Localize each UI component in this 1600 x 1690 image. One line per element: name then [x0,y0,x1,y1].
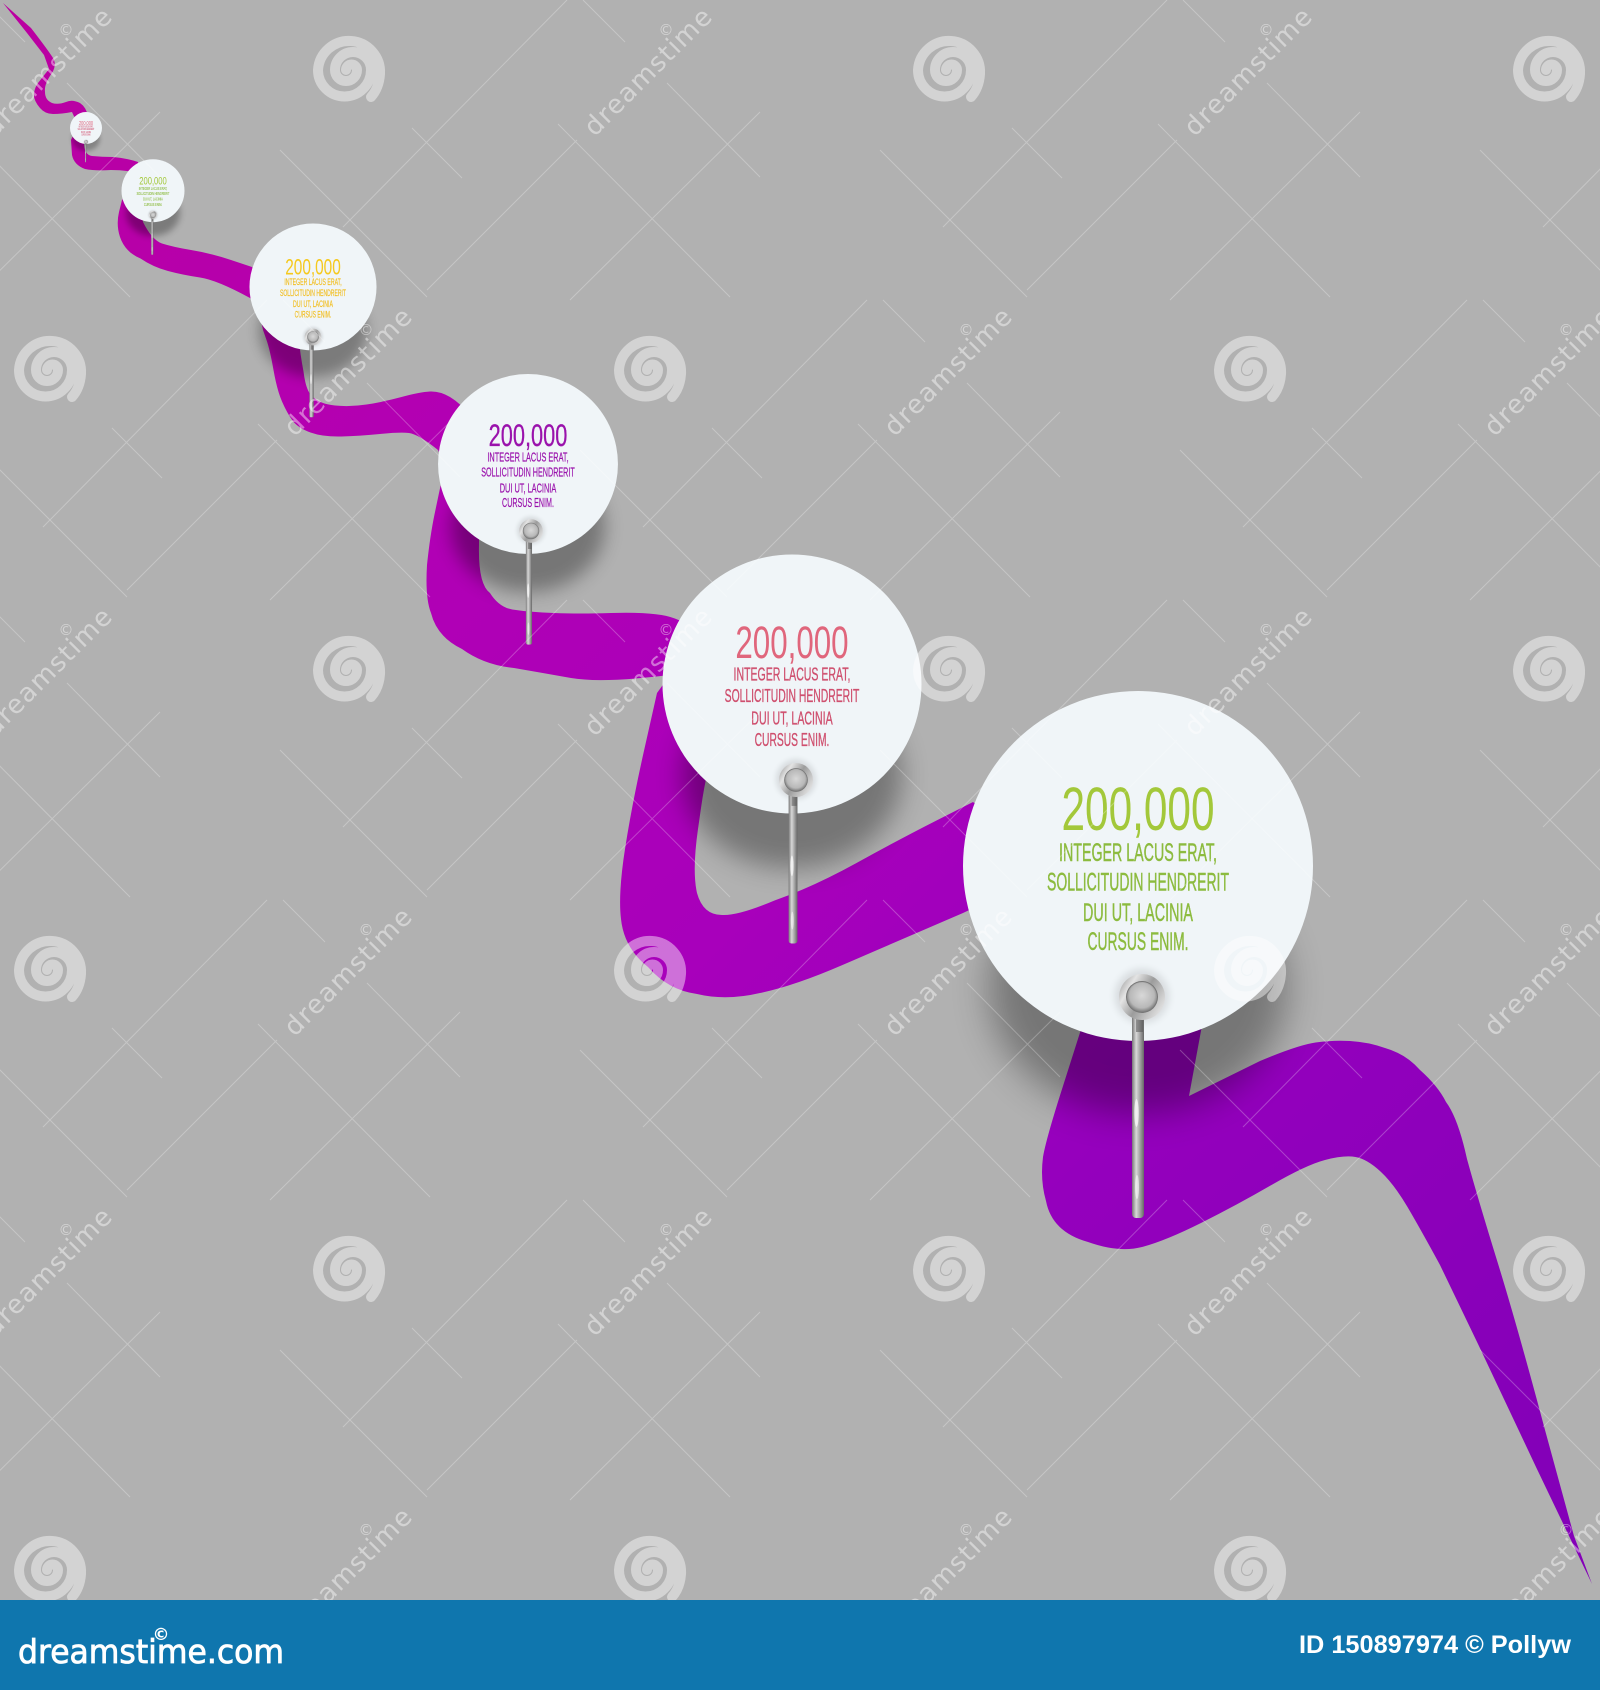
circle 4 shadow [451,462,605,592]
watermark overlay: © [58,621,74,639]
circle 6: green stat large: SOLLICITUDIN HENDRERIT [1047,868,1229,896]
circle 1: red stat [70,112,102,144]
footer bar [0,1600,1600,1690]
watermark overlay: © [1258,21,1274,39]
circle 6: green stat large: INTEGER LACUS ERAT, [1059,839,1217,867]
circle 1: red stat: 200,000 [79,121,93,127]
pin 4 [517,517,545,645]
circle 1: red stat: CURSUS ENIM. [81,135,91,137]
circle 5: rose stat: DUI UT, LACINIA [751,708,833,729]
watermark overlay: © [958,321,974,339]
circle 2: green stat [122,159,184,222]
circle 6 shadow [989,862,1287,1114]
circle 2: green stat: INTEGER LACUS ERAT, [139,186,167,191]
circle 3: yellow stat: DUI UT, LACINIA [293,299,334,309]
watermark overlay: © [358,321,374,339]
pin 3 [303,327,323,417]
watermark overlay: © [1558,921,1574,939]
circle 5: rose stat: 200,000 [735,617,849,668]
watermark overlay: © [658,621,674,639]
watermark overlay: © [58,1221,74,1239]
circle 5: rose stat: SOLLICITUDIN HENDRERIT [725,685,859,706]
circle 6: green stat large [963,691,1313,1041]
circle 1 shadow [72,127,100,151]
circle 4: purple stat: SOLLICITUDIN HENDRERIT [481,465,575,480]
watermark overlay: © [658,21,674,39]
watermark overlay: © [958,1521,974,1539]
circle 3: yellow stat [249,223,377,351]
watermark overlay: dreamstime [578,2,718,142]
circle 4: purple stat: CURSUS ENIM. [502,495,554,510]
circle 4: purple stat: 200,000 [489,418,567,453]
watermark overlay: © [1558,321,1574,339]
watermark overlay: dreamstime [1178,602,1318,742]
pin 2 [148,210,158,255]
watermark overlay: dreamstime [878,302,1018,442]
circle 6: green stat large: DUI UT, LACINIA [1083,899,1193,927]
pin 5 [776,759,816,944]
circle 3: yellow stat: SOLLICITUDIN HENDRERIT [280,288,346,298]
circle 5: rose stat [662,554,922,814]
watermark overlay: dreamstime [1178,2,1318,142]
circle 4: purple stat [438,374,618,554]
circle 1: red stat: INTEGER LACUS ERAT, [79,126,93,129]
circle 3 shadow [259,285,367,377]
watermark overlay: © [1258,1221,1274,1239]
watermark overlay: © [358,1521,374,1539]
circle 5: rose stat: CURSUS ENIM. [755,729,829,750]
watermark overlay: dreamstime [878,902,1018,1042]
circle 4: purple stat: DUI UT, LACINIA [500,480,557,495]
footer logo mark: © [152,1625,170,1645]
circle 3: yellow stat: CURSUS ENIM. [295,309,331,319]
watermark overlay: © [958,921,974,939]
circle 6: green stat large: CURSUS ENIM. [1088,928,1188,956]
circle 2 shadow [126,190,180,236]
watermark overlay: © [658,1221,674,1239]
circle 6: green stat large: 200,000 [1062,775,1214,843]
circle 2: green stat: CURSUS ENIM. [144,202,162,207]
footer logo text: dreamstime.com [18,1632,284,1671]
watermark overlay: © [358,921,374,939]
circle 5: rose stat: INTEGER LACUS ERAT, [734,663,850,684]
watermark overlay: © [58,21,74,39]
pin 1 [84,139,88,162]
circle 3: yellow stat: INTEGER LACUS ERAT, [284,277,342,287]
watermark overlay: dreamstime [278,902,418,1042]
circle 5 shadow [682,682,902,868]
watermark overlay: dreamstime [578,602,718,742]
circle 1: red stat: DUI UT, LACINIA [81,131,91,134]
pin 6 [1115,969,1169,1218]
watermark overlay: © [1258,621,1274,639]
watermark overlay: dreamstime [278,302,418,442]
watermark overlay: dreamstime [1178,1202,1318,1342]
circle 1: red stat: SOLLICITUDIN HENDRERIT [78,129,95,131]
footer credit: ID 150897974 © Pollyw [1299,1631,1572,1659]
circle 2: green stat: SOLLICITUDIN HENDRERIT [137,191,170,196]
circle 2: green stat: 200,000 [139,175,167,187]
circle 2: green stat: DUI UT, LACINIA [143,197,163,202]
watermark overlay: © [1558,1521,1574,1539]
circle 4: purple stat: INTEGER LACUS ERAT, [487,449,569,464]
watermark overlay: dreamstime [578,1202,718,1342]
watermark overlay: dreamstime [278,1502,418,1642]
circle 3: yellow stat: 200,000 [285,254,341,279]
watermark overlay: dreamstime [878,1502,1018,1642]
